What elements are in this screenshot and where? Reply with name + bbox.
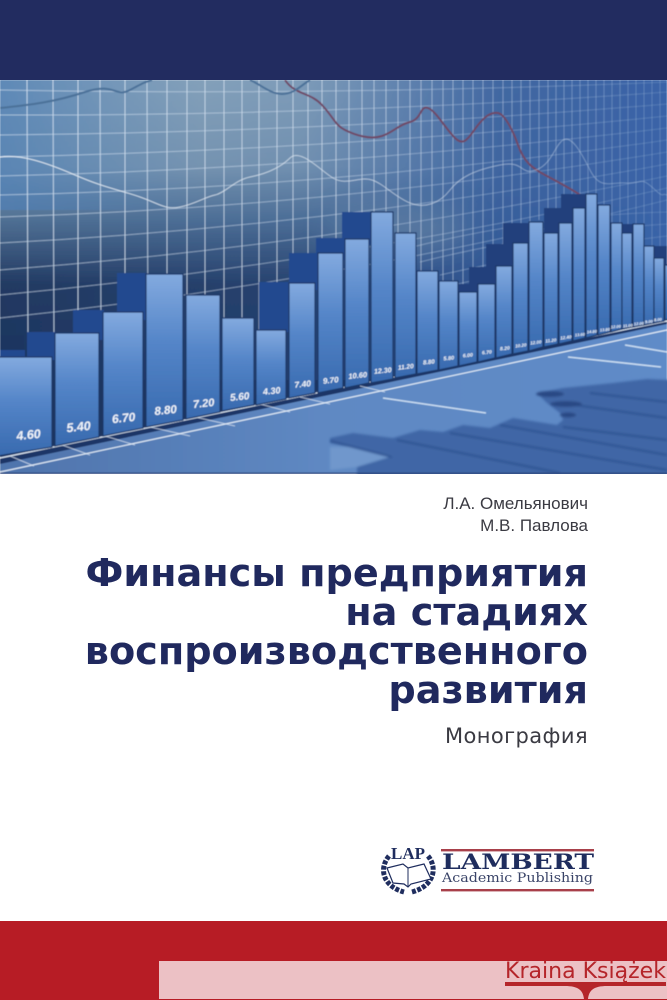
- dark bar sides, right group: [458, 194, 667, 295]
- publisher wordmark: LAMBERT: [442, 849, 594, 874]
- bar value labels: 12.00: [634, 320, 645, 327]
- bar value labels: 5.60: [229, 391, 250, 404]
- bar value labels: 14.80: [587, 328, 598, 335]
- publisher logo: [381, 844, 594, 894]
- title: на стадиях: [345, 591, 588, 635]
- chart wall background: [0, 80, 667, 474]
- cover photo: financial bar chart: [0, 80, 667, 474]
- bottom pink panel: [159, 961, 667, 999]
- floor reflection of bars: [330, 379, 667, 480]
- bar value labels: 7.20: [192, 397, 216, 411]
- icon: LAP wreath with open book: LAP: [391, 844, 425, 863]
- bar value labels: 11.00: [623, 322, 634, 329]
- title: [85, 552, 588, 713]
- bar value labels: 11.20: [545, 337, 557, 344]
- bar value labels: 4.60: [15, 427, 41, 443]
- line chart: thin white curve: [0, 139, 667, 208]
- bar value labels: 12.00: [530, 339, 542, 346]
- authors: Л.А. Омельянович: [443, 494, 588, 513]
- dark bar sides: [0, 212, 372, 360]
- title: развития: [388, 669, 588, 713]
- bottom red band: [0, 921, 667, 1000]
- title: Финансы предприятия: [86, 552, 588, 596]
- bar value labels: 12.30: [374, 367, 392, 376]
- bar value labels: 6.70: [482, 349, 492, 356]
- floor: [0, 319, 667, 474]
- bar value labels: 10.20: [515, 342, 527, 349]
- icon: LAP wreath with open book: [384, 844, 433, 892]
- title: воспроизводственного: [85, 630, 588, 674]
- publisher wordmark: Academic Publishing: [441, 871, 593, 886]
- bar value labels: 8.80: [423, 359, 436, 367]
- bar value labels: 8.80: [154, 404, 178, 418]
- bars: [0, 194, 667, 456]
- bar value labels: 8.20: [500, 345, 510, 352]
- second author: М.В. Павлова: [480, 516, 588, 535]
- bar value labels: 13.80: [600, 326, 611, 333]
- line chart: dark red curve: [285, 80, 585, 198]
- subtitle: Монография: [445, 724, 588, 748]
- bar value labels: 4.30: [261, 385, 281, 397]
- bar value labels: 12.00: [611, 323, 622, 330]
- bar value labels: 6.00: [463, 352, 473, 360]
- bar value labels: 7.40: [294, 378, 312, 390]
- top navy band: [0, 0, 667, 80]
- bar value labels: 9.70: [323, 375, 339, 386]
- bar value labels: 5.40: [66, 419, 91, 435]
- wall grid lines: [0, 80, 667, 350]
- bar value labels: [15, 317, 663, 443]
- bar value labels: 6.70: [111, 410, 136, 426]
- bar value labels: 13.60: [575, 331, 586, 338]
- bar value labels: 9.00: [645, 319, 654, 324]
- bar value labels: 10.60: [348, 370, 368, 381]
- publisher wordmark: [441, 849, 594, 891]
- bar value labels: 11.20: [398, 363, 414, 372]
- line chart: blue curve: [0, 80, 310, 108]
- bar value labels: 5.80: [443, 355, 455, 363]
- bar value labels: 8.00: [654, 317, 663, 322]
- watermark: Kraina Książek: [505, 960, 666, 999]
- bar value labels: 12.40: [560, 334, 572, 341]
